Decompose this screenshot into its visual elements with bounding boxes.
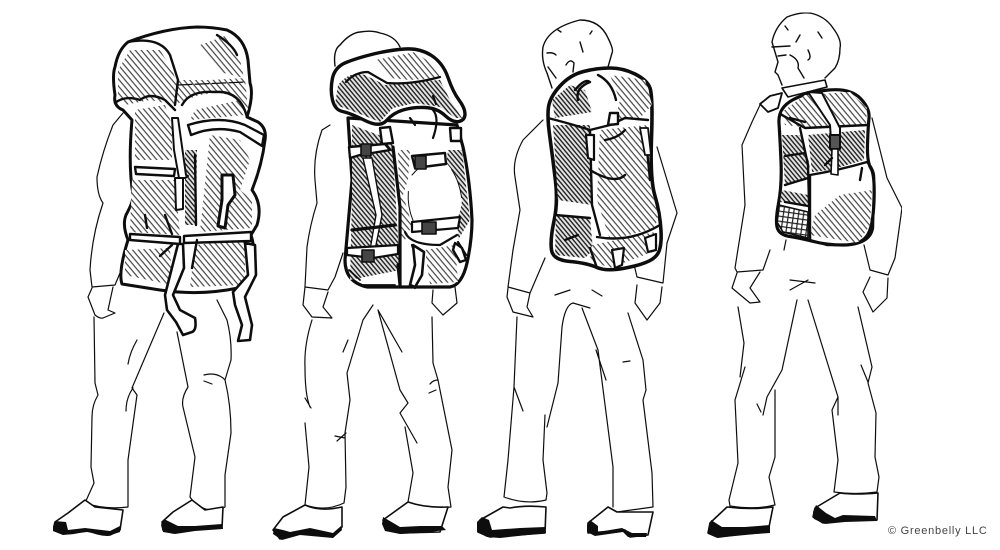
shoulder strap buckles: [380, 127, 461, 144]
crease lines: [145, 155, 197, 268]
zipper toggles: [172, 118, 188, 210]
right bulge shading: [597, 125, 658, 240]
middle shading: [808, 130, 865, 172]
right side shading: [445, 150, 470, 240]
compression strap 1: [135, 167, 175, 176]
lid: [331, 49, 465, 124]
lower left shading: [555, 215, 593, 258]
copyright credit: © Greenbelly LLC: [888, 525, 988, 537]
figure 3 backpack: [548, 68, 661, 270]
lid creases: [346, 72, 440, 138]
upper strap buckle: [361, 144, 371, 156]
figure 1 left boot toe: [53, 521, 120, 536]
bottom pocket clip: [410, 245, 424, 287]
figure 3 left boot: [478, 506, 546, 537]
upper strap right: [412, 153, 446, 168]
lower strap right buckle: [422, 222, 436, 234]
lower strap left buckle: [362, 250, 374, 262]
lid shading: [118, 50, 248, 110]
top right shading: [610, 75, 652, 120]
figure 4 collar: [782, 80, 827, 97]
figure 1 right boot toe: [161, 519, 223, 534]
upper strap left: [349, 144, 390, 158]
side clip: [640, 128, 651, 155]
figure 2 arm and hands: [303, 125, 457, 318]
seams: [548, 75, 660, 268]
figure 3 arms and hands: [507, 120, 677, 320]
figure 1 legs: [85, 300, 231, 510]
figure 4 right boot sole: [813, 505, 877, 524]
vertical strap: [363, 158, 382, 250]
lid lines: [115, 35, 247, 117]
figure 4 head: [772, 13, 840, 85]
left shoulder strap: [760, 93, 782, 112]
pocket tab: [218, 175, 235, 228]
figure 1 arm and hand: [88, 113, 123, 318]
lid seam: [178, 82, 245, 85]
bottom pocket shading: [425, 245, 458, 284]
lid shading: [335, 74, 462, 122]
left side shading: [553, 125, 592, 205]
top buckle: [608, 113, 618, 125]
figure 1: largest backpack: [53, 27, 265, 536]
dangling strap left: [165, 244, 196, 335]
main pocket outline: [810, 162, 874, 245]
bottom shading: [125, 240, 245, 287]
pack silhouette: [114, 27, 265, 293]
side lower shading: [780, 190, 808, 205]
figure 2 right boot: [383, 502, 448, 533]
figure 1 left boot: [53, 500, 123, 535]
figure 4 left boot: [708, 507, 773, 537]
figure 2 right boot sole: [382, 517, 446, 534]
strap tail: [831, 149, 838, 175]
left panel shading: [350, 125, 400, 280]
pack silhouette: [548, 68, 661, 270]
figure 4 backpack: [760, 90, 874, 245]
main pocket shading: [810, 190, 872, 243]
bottom creases: [349, 270, 395, 285]
figure 3: medium backpack: [477, 20, 677, 538]
figure 2: large backpack: [273, 31, 472, 540]
lid top shading: [375, 52, 440, 80]
bottom shading: [590, 232, 658, 268]
pocket crease: [825, 158, 862, 180]
figure 4 right boot: [813, 493, 878, 523]
figure 4 arms and hands: [732, 97, 902, 312]
figure 2 left boot: [273, 505, 342, 539]
right pocket flap: [188, 120, 264, 146]
strap buckle: [830, 135, 840, 149]
figure 4 legs: [729, 240, 879, 508]
figure 1 right boot: [162, 500, 223, 533]
mid pocket shading: [130, 180, 180, 235]
top strap: [808, 92, 840, 140]
center divider: [352, 147, 400, 287]
top shading: [552, 85, 592, 118]
compression strap 2: [130, 232, 251, 244]
figure 4: small backpack: [708, 13, 902, 538]
figure 3 legs: [504, 290, 653, 512]
upper strap right buckle: [415, 156, 426, 169]
figure 2 left boot sole: [273, 526, 342, 540]
lower strap right: [412, 217, 460, 232]
figure 3 right boot sole: [587, 520, 647, 537]
figure 4 left boot sole: [708, 520, 770, 538]
figure 2 legs: [305, 305, 452, 508]
lid seam: [782, 115, 868, 240]
center clip: [586, 135, 594, 160]
right pocket shading: [190, 100, 252, 232]
lid shading: [782, 92, 867, 128]
figure 1 backpack: [114, 27, 265, 341]
upper pocket shading: [135, 105, 172, 160]
white opening: [408, 158, 462, 225]
figure 3 head: [542, 20, 612, 88]
waist band: [405, 232, 466, 288]
figure 2 head: [335, 31, 400, 66]
lower strap left: [347, 245, 398, 258]
figure 2 backpack: [331, 49, 472, 288]
side pocket shading: [782, 135, 810, 185]
figure 3 right boot: [588, 507, 653, 537]
pack silhouette: [776, 90, 874, 245]
figure 3 left boot sole: [477, 517, 546, 538]
center strip shading: [185, 150, 197, 225]
dangling strap right: [233, 243, 256, 341]
mesh pocket: [777, 205, 808, 238]
top lid highlight shading: [200, 36, 244, 78]
side buckle: [453, 243, 466, 262]
center panel shading: [398, 150, 412, 240]
lower pack body: [345, 118, 472, 287]
bottom buckles: [612, 234, 656, 268]
